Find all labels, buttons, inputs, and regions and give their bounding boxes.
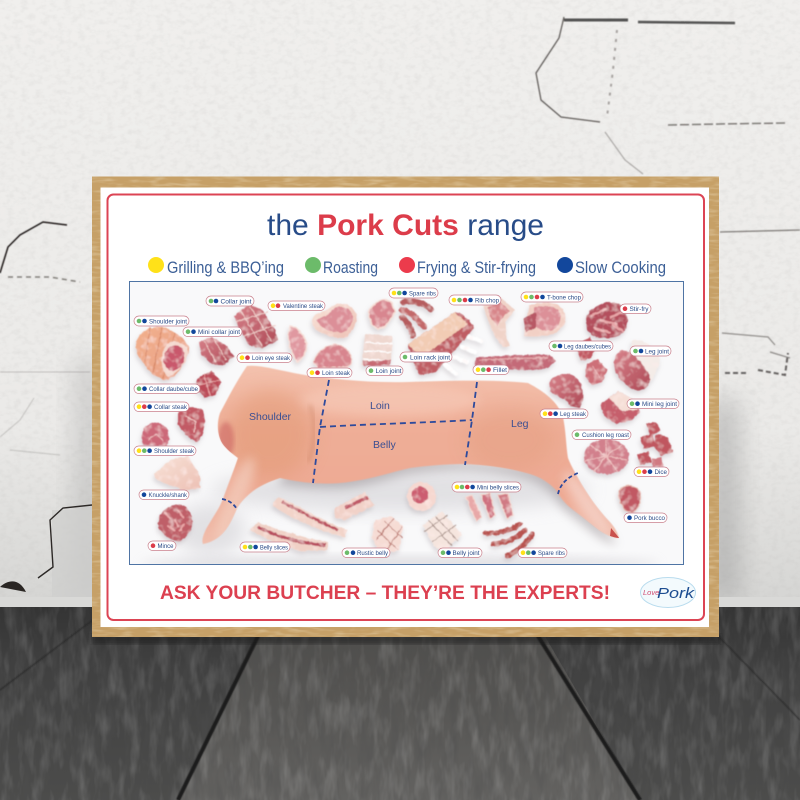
- cut: knuckle shank: [154, 456, 200, 490]
- cut: spare ribs: [485, 524, 532, 556]
- legend: slow cooking: Slow Cooking: [575, 259, 666, 277]
- label: cushion leg roast: [572, 430, 631, 440]
- cut: loin joint: [362, 334, 392, 366]
- cut: shoulder steak: [142, 423, 169, 446]
- label: mini belly slices: Mini belly slices: [477, 484, 520, 491]
- label: valentine steak: Valentine steak: [283, 303, 324, 310]
- label: collar joint: [206, 296, 254, 306]
- label: belly slices: [240, 542, 290, 552]
- label: t-bone chop: T-bone chop: [547, 294, 581, 301]
- cut: belly slice long: [273, 497, 347, 537]
- label: loin rack joint: [400, 352, 452, 362]
- cut: t-bone chop: [524, 303, 565, 337]
- cut: pork bucco: [619, 486, 641, 513]
- label: belly joint: [438, 548, 482, 558]
- legend: grilling: Grilling & BBQ’ing: [167, 259, 284, 277]
- label: pork bucco: [624, 513, 667, 522]
- label: stir-fry: [620, 304, 651, 314]
- cut: belly round: [407, 482, 436, 511]
- label: leg steak: Leg steak: [560, 411, 587, 418]
- cut: valentine steak: [312, 304, 356, 338]
- cut: shoulder joint: [136, 327, 189, 380]
- legend: cooking methods: [148, 257, 666, 277]
- label: t-bone chop: [521, 292, 583, 302]
- label: loin eye steak: [237, 353, 292, 362]
- cut: leg steak: [550, 374, 583, 408]
- legend: roasting: [305, 257, 378, 277]
- label: fillet: Fillet: [493, 367, 507, 374]
- pig carcass: [202, 366, 620, 546]
- label: valentine steak: [268, 301, 325, 310]
- cut: collar joint: [234, 304, 278, 348]
- label: stir-fry: Stir-fry: [630, 306, 649, 313]
- label: fillet: [473, 365, 509, 374]
- label: leg joint: Leg joint: [645, 348, 669, 355]
- label: shoulder steak: Shoulder steak: [154, 448, 195, 455]
- label: loin joint: Loin joint: [376, 368, 402, 375]
- label: belly slices: Belly slices: [260, 544, 289, 551]
- cut: fillet: [475, 355, 556, 370]
- label: belly joint: Belly joint: [452, 550, 480, 557]
- label: pork bucco: Pork bucco: [634, 515, 665, 522]
- label: leg joint: [630, 346, 671, 356]
- panel: pork cuts chart: [130, 282, 684, 570]
- cut: mince: [158, 505, 192, 541]
- background: plaster wall: [0, 0, 800, 610]
- legend: frying: Frying & Stir-frying: [417, 259, 536, 277]
- cut: scored belly: [372, 516, 403, 553]
- label: mini leg joint: Mini leg joint: [642, 401, 677, 408]
- label: loin joint: [366, 366, 403, 376]
- slogan: ASK YOUR BUTCHER – THEY’RE THE EXPERTS!: [160, 583, 610, 604]
- wooden frame: [92, 176, 719, 637]
- cut: belly slice lower: [250, 522, 328, 551]
- cut: mini collar joint: [199, 337, 234, 365]
- label: shoulder joint: Shoulder joint: [149, 318, 187, 325]
- label: loin rack joint: Loin rack joint: [410, 354, 450, 361]
- logo: love pork: Love: [643, 588, 659, 597]
- label: spare ribs top: Spare ribs: [409, 290, 437, 297]
- cut: leg joint: [614, 340, 660, 390]
- meat cuts: [136, 297, 673, 556]
- title: the Pork Cuts range: [267, 209, 544, 242]
- label: mini leg joint: [627, 399, 679, 408]
- label: collar steak: [134, 402, 189, 412]
- cut: loin eye steak: [288, 326, 307, 362]
- label: dice: [634, 467, 669, 476]
- label: spare ribs: [518, 548, 567, 558]
- cut labels: [134, 288, 679, 558]
- section label: leg: Leg: [511, 418, 529, 430]
- label: shoulder joint: [134, 316, 189, 326]
- label: leg daubes/cubes: Leg daubes/cubes: [564, 343, 612, 350]
- label: rib chop: Rib chop: [475, 297, 499, 304]
- label: loin eye steak: Loin eye steak: [252, 355, 291, 362]
- label: loin steak: [307, 368, 352, 378]
- cut: spare ribs top: [402, 301, 431, 335]
- label: cushion leg roast: Cushion leg roast: [582, 432, 629, 439]
- label: collar steak: Collar steak: [154, 404, 188, 411]
- cut: rib chop: [483, 297, 515, 347]
- label: leg daubes/cubes: [549, 341, 613, 351]
- cut lines: [222, 380, 578, 509]
- legend: slow cooking: [557, 257, 666, 277]
- cut: collar steak: [178, 407, 205, 442]
- logo: love pork: [640, 578, 696, 608]
- label: knuckle/shank: [139, 490, 189, 500]
- label: dice: Dice: [654, 469, 667, 476]
- label: collar joint: Collar joint: [220, 298, 252, 305]
- label: knuckle/shank: Knuckle/shank: [148, 492, 188, 499]
- label: mince: Mince: [158, 543, 174, 550]
- cut: loin steak: [313, 344, 352, 368]
- label: rib chop: [449, 295, 501, 305]
- legend: roasting: Roasting: [323, 259, 378, 277]
- poster red rounded border: [108, 194, 704, 620]
- section label: loin: Loin: [370, 400, 390, 412]
- background: wooden floor: [0, 607, 800, 800]
- cut: belly joint: [423, 511, 462, 551]
- cut: collar cube: [195, 371, 221, 398]
- cut: leg daubes: [577, 337, 595, 361]
- section label: belly: Belly: [373, 439, 397, 451]
- cut: loin rack: [408, 312, 481, 375]
- label: spare ribs top: [389, 288, 438, 298]
- cut: mini leg joint: [600, 391, 640, 424]
- label: collar daube/cube: [134, 384, 200, 394]
- label: rustic belly: Rustic belly: [357, 550, 389, 557]
- cut: cushion leg roast: [584, 439, 629, 474]
- label: collar daube/cube: Collar daube/cube: [149, 386, 198, 393]
- cut: mini belly slices: [466, 493, 513, 521]
- cut: dice: [637, 422, 673, 467]
- label: mince: [148, 541, 176, 550]
- cut: leg cubes: [585, 359, 607, 385]
- cut: stir-fry: [586, 302, 628, 338]
- section label: shoulder: Shoulder: [249, 411, 292, 423]
- cut: chop: [369, 300, 395, 329]
- cut: rustic belly roll: [335, 492, 374, 520]
- label: spare ribs: Spare ribs: [538, 550, 566, 557]
- label: loin steak: Loin steak: [322, 370, 351, 377]
- label: mini collar joint: Mini collar joint: [198, 329, 240, 336]
- label: shoulder steak: [134, 446, 196, 456]
- label: mini collar joint: [183, 327, 242, 336]
- label: rustic belly: [342, 548, 390, 558]
- label: mini belly slices: [452, 482, 521, 492]
- logo: love pork: Pork: [657, 585, 696, 602]
- label: leg steak: [540, 409, 588, 418]
